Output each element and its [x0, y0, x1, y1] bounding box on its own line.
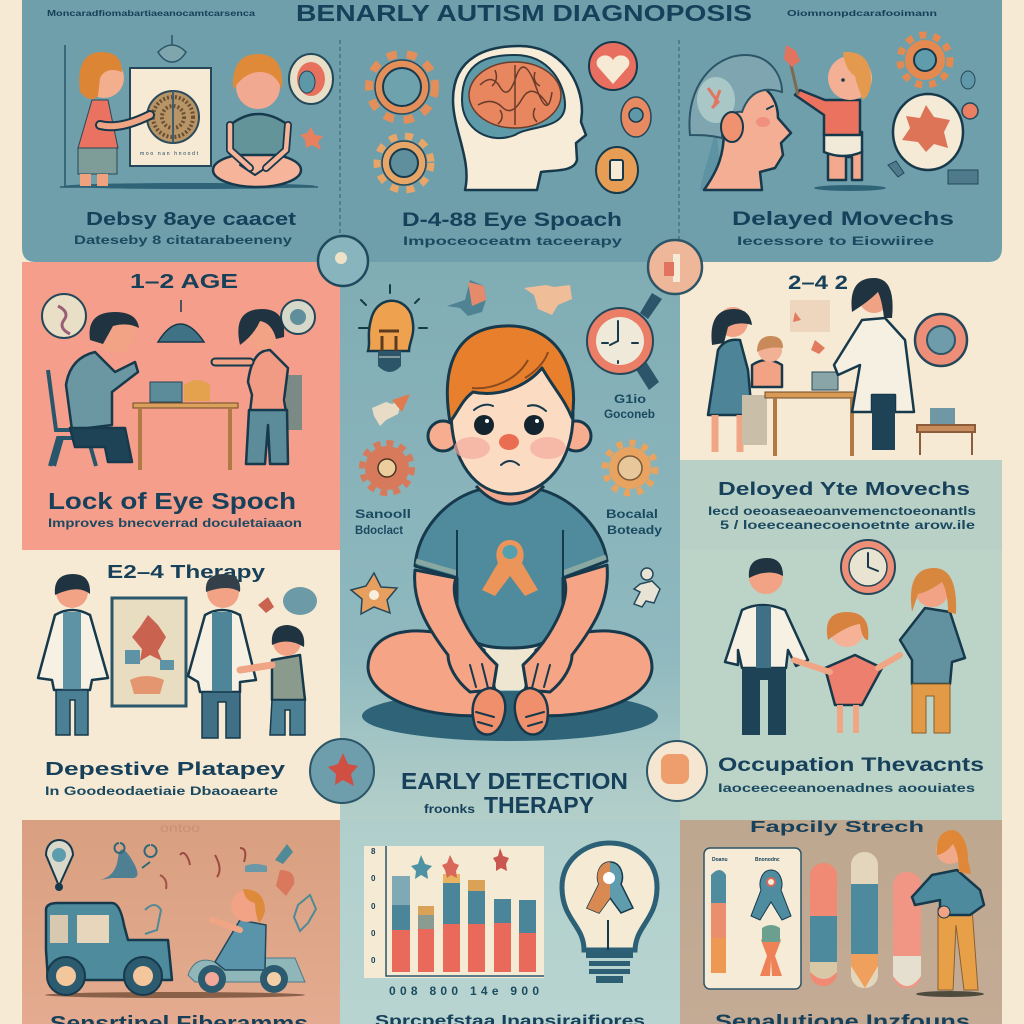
- scribbled icons: [100, 843, 316, 934]
- scene: mother child doctor: [708, 278, 914, 456]
- caption: Lock of Eye Spoch: [48, 488, 296, 514]
- icon: lightbulb: [359, 285, 427, 372]
- caption: Depestive Platapey: [45, 759, 285, 779]
- caption right: Iecessore to Eiowiiree: [737, 234, 935, 248]
- icon: gear top: [369, 54, 435, 120]
- icon: truck: [45, 903, 305, 998]
- caption: Iaoceeceeanoenadnes aoouiates: [718, 781, 975, 795]
- axis ticks labels: 8: [371, 847, 376, 856]
- caption left: [74, 209, 296, 247]
- panel: bottom left: [22, 820, 340, 1024]
- label: left: Sanooll: [355, 507, 411, 521]
- label: left: [355, 507, 411, 537]
- scene: therapy table: [42, 294, 315, 470]
- title: early detection: froonks: [424, 802, 475, 816]
- t-shirt: [415, 490, 607, 648]
- panel: delayed caption strip: [680, 460, 1002, 550]
- caption: In Goodeodaetiaie Dbaoaearte: [45, 784, 278, 798]
- axis ticks labels: 0: [371, 929, 376, 938]
- title: BENARLY AUTISM DIAGNOPOSIS: [296, 0, 752, 26]
- connector badge: top right: [648, 240, 702, 294]
- figure: sitting child: [362, 326, 658, 741]
- icon: coin: [596, 147, 638, 193]
- icon: clock magnifier: [587, 293, 662, 390]
- caption: Improves bnecverrad doculetaiaaon: [48, 516, 302, 530]
- heading: E2–4 Therapy: [107, 562, 265, 582]
- label: top right: Goconeb: [604, 407, 655, 421]
- left leg: [368, 631, 495, 716]
- connector badge: lower left: [310, 739, 374, 803]
- scene: child at brain poster: moo nan hnoodt: [140, 151, 199, 157]
- header small text left: Moncaradfiomabartiaeanocamtcarsenca: [47, 9, 256, 18]
- feet: [473, 688, 505, 735]
- panel: centre child: [340, 262, 680, 820]
- caption: [45, 759, 285, 798]
- figure: child right: [240, 625, 305, 735]
- label: top right: G1io: [614, 392, 646, 406]
- bar chart: [364, 846, 544, 978]
- panel: therapy left: [22, 550, 340, 820]
- heading: 2–4 2: [788, 273, 848, 294]
- sub text: Iecd oeoaseaeoanvemenctoeonantls: [708, 504, 976, 518]
- shirt ribbon: [482, 540, 538, 596]
- caption middle: Impoceoceatm taceerapy: [403, 234, 622, 248]
- header small text right: Oiomnonpdcarafooimann: [787, 9, 937, 18]
- figure: doctor centre: [188, 574, 256, 738]
- hair: [447, 326, 574, 422]
- caption: [48, 488, 302, 530]
- caption right: Delayed Movechs: [732, 209, 954, 230]
- icon: clock: [841, 540, 895, 594]
- panel: age 2-4: [680, 262, 1002, 460]
- ribbon card: Bnonodnc: [755, 857, 780, 863]
- column dividers: [340, 40, 679, 262]
- right arm: [523, 565, 607, 692]
- label: right: [606, 507, 662, 537]
- chart x labels: 008 800 14e 900: [389, 984, 539, 998]
- icon: heart: [589, 42, 637, 90]
- scene: toddler reaching up: [784, 45, 886, 191]
- scene: doctor, girl, woman: [725, 558, 965, 735]
- caption middle: [402, 210, 622, 248]
- panel: top banner: [22, 0, 1002, 262]
- icon: small figure: [634, 568, 660, 607]
- caption right: [732, 209, 954, 248]
- face: [451, 340, 573, 494]
- figure: doctor left: [38, 574, 108, 735]
- label: top right: [604, 392, 655, 421]
- connector badge: lower right: [647, 741, 707, 801]
- icon: star: [351, 573, 397, 614]
- label: left: Bdoclact: [355, 523, 403, 537]
- icon: gear left: [362, 443, 412, 493]
- ribbon card: [704, 848, 801, 989]
- sub text: [708, 504, 976, 532]
- right leg: [525, 631, 652, 716]
- sub text: 5 / loeeceanecoenoetnte arow.ile: [720, 518, 975, 532]
- panel: bottom right: [680, 819, 1002, 1024]
- axis ticks labels: 0: [371, 956, 376, 965]
- figure: child in toy car: [188, 889, 305, 993]
- icons: floating puzzle pieces: [372, 280, 572, 426]
- icon: small mixed emblem: [621, 97, 651, 137]
- colour pills: [810, 852, 921, 988]
- connector badge: top left: [318, 236, 368, 286]
- axis ticks labels: 0: [371, 874, 376, 883]
- icon: small table: [917, 408, 975, 455]
- faint heading: ontoo: [160, 821, 200, 835]
- title: early detection: EARLY DETECTION: [401, 768, 628, 794]
- icon: gear lower: [377, 136, 431, 190]
- left arm: [415, 570, 497, 692]
- axis ticks labels: [371, 847, 376, 965]
- icon: head profile with brain: [453, 46, 586, 190]
- heading: 1–2 AGE: [130, 271, 238, 293]
- heading: Fapcily Strech: [750, 819, 924, 836]
- icon: tokens: [258, 587, 317, 615]
- panel: bottom middle: [340, 820, 680, 1024]
- label: right: Boteady: [607, 523, 662, 537]
- axis ticks labels: 0: [371, 902, 376, 911]
- panel: age 1-2: [22, 262, 340, 550]
- ribbon card: Doanu: [712, 857, 728, 863]
- title: early detection: [401, 768, 628, 818]
- figure: woman pointing: [912, 830, 984, 997]
- caption left: Debsy 8aye caacet: [86, 209, 296, 229]
- icon: puzzle badge: [893, 94, 963, 170]
- icon: map pin bulb: [46, 840, 73, 891]
- scene: child at brain poster: [60, 35, 333, 189]
- icon: gear right: [605, 443, 655, 493]
- caption: Occupation Thevacnts: [718, 755, 984, 776]
- caption middle: D-4-88 Eye Spoach: [402, 210, 622, 231]
- caption left: Dateseby 8 citatarabeeneny: [74, 233, 292, 247]
- icon: target badge: [915, 314, 967, 366]
- icon: orange gear right: [900, 35, 950, 85]
- caption: Deloyed Yte Movechs: [718, 479, 970, 499]
- caption: [718, 755, 984, 795]
- icon: small tokens: [888, 71, 978, 184]
- title: early detection: THERAPY: [484, 792, 594, 818]
- label: right: Bocalal: [606, 507, 658, 521]
- icon: bulb with ribbon: [562, 843, 657, 983]
- panel: occupational therapy: [680, 540, 1002, 820]
- scene: side-profile head: [689, 55, 791, 190]
- chart poster: [112, 598, 186, 706]
